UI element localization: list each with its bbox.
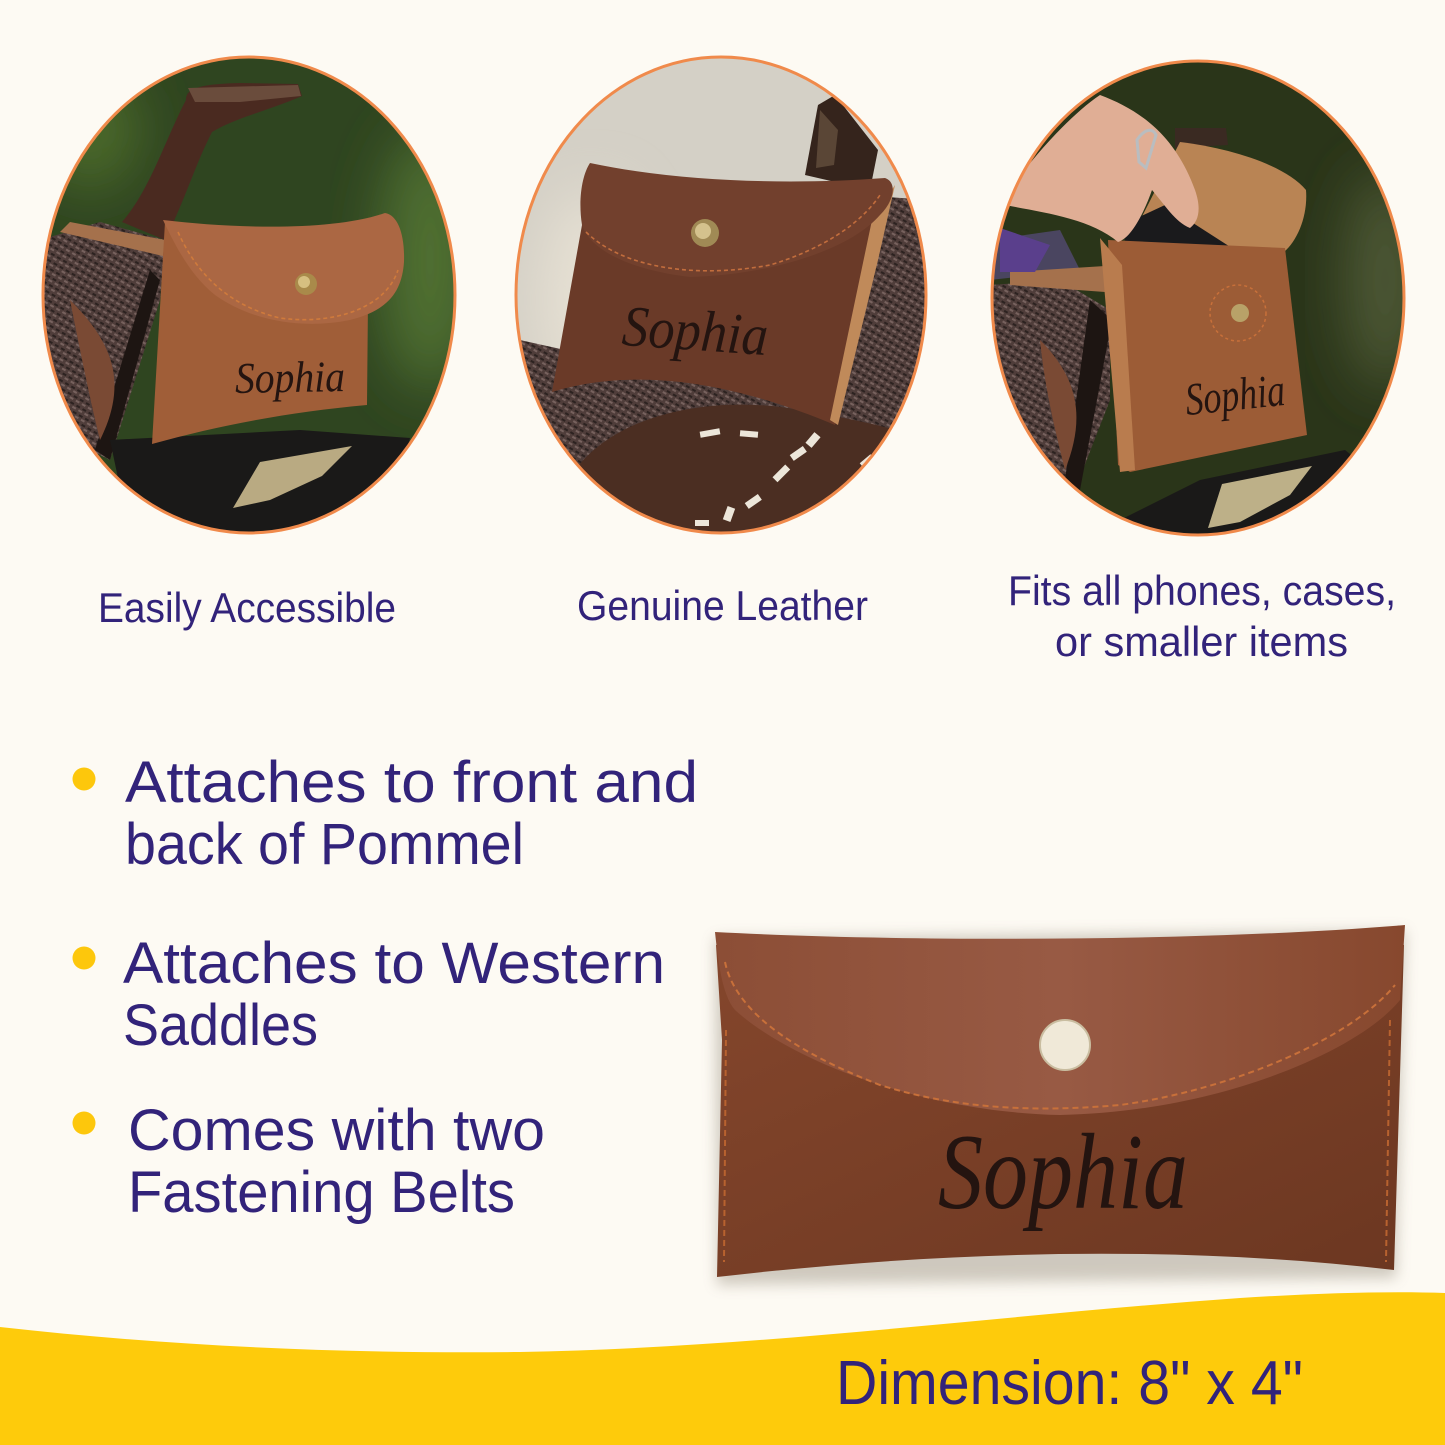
dimension label: Dimension: 8" x 4" (836, 1349, 1303, 1418)
caption: genuine leather: Genuine Leather (577, 582, 868, 629)
product photo: large leather pouch (715, 925, 1405, 1285)
bullet: comes with two belts (72, 1098, 545, 1225)
photo circle: fits all phones (990, 60, 1425, 540)
bullet: attaches to western saddles: Saddles (123, 993, 318, 1058)
photo circle: genuine leather: Sophia (620, 293, 770, 368)
bullet: attaches to front and back (72, 750, 698, 877)
photo circle: fits all phones: Sophia (1183, 364, 1287, 425)
bullet: comes with two belts: Fastening Belts (128, 1160, 515, 1225)
caption: fits all phones: or smaller items (1055, 618, 1348, 665)
caption: fits all phones (1008, 567, 1396, 665)
bullet: attaches to front and back: Attaches to front and (125, 750, 698, 815)
bullet: attaches to western saddles: Attaches to Western (123, 931, 665, 996)
photo circle: easily accessible: Sophia (235, 352, 345, 403)
product photo: large leather pouch: Sophia (938, 1113, 1188, 1232)
yellow footer wave (0, 1292, 1445, 1445)
bullet: comes with two belts: Comes with two (128, 1098, 545, 1163)
caption: fits all phones: Fits all phones, cases, (1008, 567, 1396, 614)
bullet: attaches to front and back: back of Pommel (125, 812, 524, 877)
caption: easily accessible: Easily Accessible (98, 584, 396, 631)
photo circle: easily accessible (40, 55, 480, 535)
photo circle: genuine leather (510, 55, 930, 540)
bullet: attaches to western saddles (72, 931, 665, 1058)
